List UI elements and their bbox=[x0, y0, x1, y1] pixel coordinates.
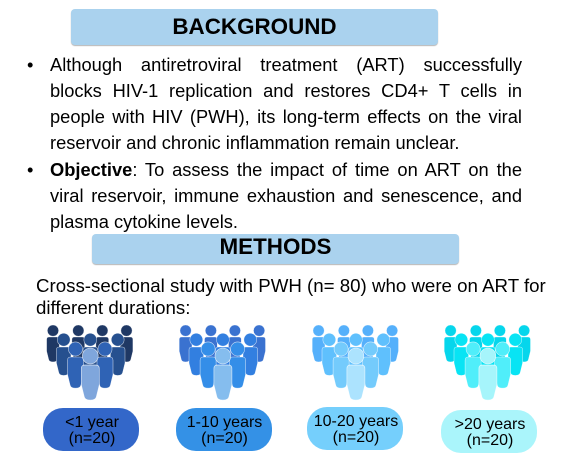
icon: people group 10-20 years bbox=[312, 325, 398, 400]
label pill: over 20 years bbox=[441, 410, 537, 453]
label pill: over 20 years: (n=20) bbox=[467, 432, 513, 449]
label pill: 10-20 years: (n=20) bbox=[333, 429, 379, 446]
label pill: 1-10 years: 1-10 years bbox=[187, 414, 262, 430]
heading: background banner: BACKGROUND bbox=[172, 14, 337, 39]
text block: background bullet: people with HIV (PWH), its long-term effects on the viral bbox=[50, 106, 522, 127]
label pill: 1-10 years bbox=[176, 408, 272, 451]
text block: objective bullet bbox=[27, 159, 522, 232]
heading: background banner bbox=[71, 9, 438, 45]
text block: study description bbox=[36, 275, 546, 318]
icon: people group under 1 year bbox=[47, 325, 133, 400]
text block: objective bullet: • bbox=[27, 159, 33, 180]
label pill: under 1 year bbox=[43, 408, 139, 451]
label pill: 1-10 years: (n=20) bbox=[201, 430, 248, 447]
label pill: under 1 year: <1 year bbox=[65, 414, 119, 430]
label pill: under 1 year: (n=20) bbox=[69, 430, 115, 447]
label pill: 10-20 years: 10-20 years bbox=[314, 412, 398, 430]
icon: people group over 20 years bbox=[444, 325, 530, 400]
text block: background bullet: • bbox=[27, 54, 33, 75]
text block: background bullet: Although antiretroviral treatment (ART) successfully bbox=[50, 54, 522, 75]
text block: objective bullet: plasma cytokine levels. bbox=[50, 211, 238, 232]
text block: objective bullet: viral reservoir, immune exhaustion and senescence, and bbox=[50, 185, 522, 206]
text block: background bullet: blocks HIV-1 replication and restores CD4+ T cells in bbox=[50, 80, 522, 101]
heading: methods banner bbox=[92, 234, 459, 264]
text block: background bullet: reservoir and chronic inflammation remain unclear. bbox=[50, 132, 459, 153]
heading: methods banner: METHODS bbox=[220, 234, 331, 259]
text block: background bullet bbox=[27, 54, 522, 153]
label pill: 10-20 years bbox=[307, 407, 403, 450]
icon: people group 1-10 years bbox=[179, 325, 266, 400]
text block: objective bullet: Objective: To assess the impact of time on ART on the bbox=[50, 159, 522, 180]
label pill: over 20 years: >20 years bbox=[455, 416, 525, 432]
text block: study description: Cross-sectional study with PWH (n= 80) who were on ART for bbox=[36, 275, 546, 296]
text block: study description: different durations: bbox=[36, 297, 190, 318]
